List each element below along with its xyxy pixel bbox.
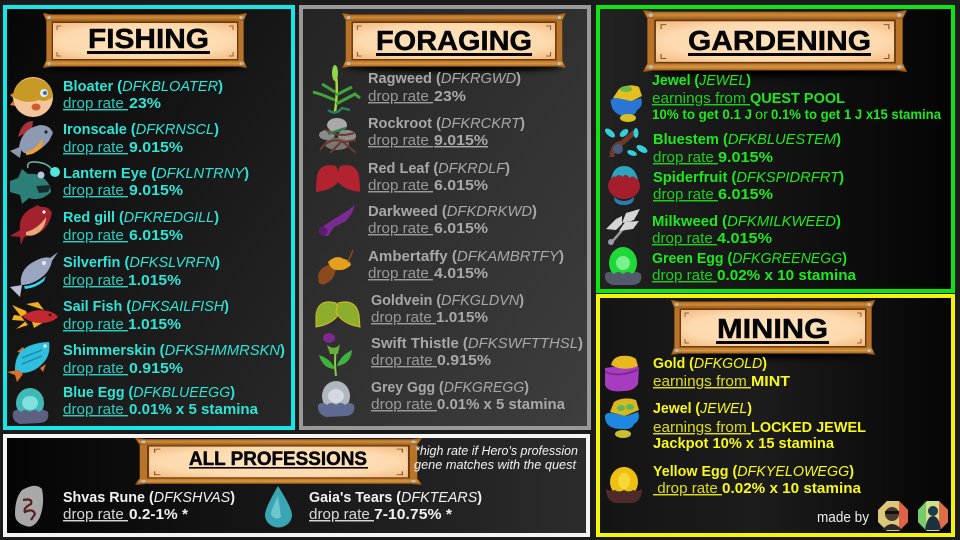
item: Swift Thistle: 0.915%: [437, 353, 491, 369]
item: Jewel (mining): [605, 398, 866, 452]
icon: shimmerskin: [7, 342, 49, 382]
item: Shvas Rune: Shvas Rune (DFKSHVAS): [63, 490, 235, 506]
item: Jewel: Jewel (JEWEL): [652, 73, 751, 89]
heading: mining: MINING: [717, 313, 828, 344]
icon: blue egg: [13, 388, 48, 424]
icon: ironscale: [10, 121, 53, 158]
item: Shimmerskin: [7, 342, 285, 382]
icon: jewel: [611, 85, 642, 122]
item: Red Leaf: [316, 161, 510, 194]
icon: swift thistle: [319, 333, 352, 376]
item: Blue Egg: drop rate: [63, 402, 128, 418]
icon: sail fish: [12, 302, 58, 329]
item: Bluestem: drop rate: [653, 150, 718, 166]
icon: red gill: [10, 205, 52, 245]
item: Gaia's Tears: [265, 486, 482, 527]
item: Shimmerskin: 0.915%: [129, 361, 183, 377]
icon: green egg: [605, 247, 641, 285]
item: Gaia's Tears: 7-10.75% *: [374, 507, 452, 523]
heading: all professions: ALL PROFESSIONS: [189, 449, 367, 470]
icon: grey egg: [318, 381, 354, 417]
item: Goldvein: drop rate: [371, 310, 436, 326]
item: Grey Egg: [318, 380, 566, 417]
icon: gaia's tear: [265, 486, 292, 527]
item: Ragweed: 23%: [434, 89, 466, 105]
item: Ambertaffy: 4.015%: [434, 266, 488, 282]
item: Ironscale: [10, 121, 219, 158]
heading: gardening: [643, 10, 907, 77]
item: Bluestem: Bluestem (DFKBLUESTEM): [653, 132, 841, 148]
item: Swift Thistle: [319, 333, 583, 376]
item: Lantern Eye: drop rate: [63, 183, 128, 199]
item: Grey Egg: drop rate: [371, 397, 437, 413]
item: Jewel: earnings from: [652, 91, 750, 107]
item: Red gill: Red gill (DFKREDGILL): [63, 210, 219, 226]
panel: mining: [598, 296, 953, 535]
item: Goldvein: [316, 293, 524, 327]
note: high rate footnote: [414, 444, 578, 472]
panel: fishing: [5, 7, 293, 428]
item: Green Egg: [605, 247, 857, 285]
note: high rate footnote: gene matches with the quest: [414, 458, 577, 472]
heading: gardening: GARDENING: [688, 25, 871, 56]
icon: avatar two: [918, 501, 948, 531]
item: Red gill: [10, 205, 219, 245]
item: Shvas Rune: 0.2-1% *: [129, 507, 188, 523]
item: Gaia's Tears: drop rate: [309, 507, 374, 523]
item: Green Egg: Green Egg (DFKGREENEGG): [652, 251, 847, 267]
item: Lantern Eye: [10, 162, 249, 204]
icon: milkweed: [606, 209, 640, 245]
item: Goldvein: Goldvein (DFKGLDVN): [371, 293, 524, 309]
item: Shimmerskin: drop rate: [63, 361, 128, 377]
item: Silverfin: drop rate: [63, 273, 128, 289]
item: Blue Egg: [13, 385, 259, 424]
item: Bloater: [10, 77, 223, 117]
item: Green Egg: drop rate: [652, 268, 717, 284]
item: Grey Egg: Grey Ggg (DFKGREGG): [371, 380, 529, 396]
item: Lantern Eye: Lantern Eye (DFKLNTRNY): [63, 166, 249, 182]
item: Jewel (mining): earnings from: [653, 420, 751, 436]
icon: red leaf: [316, 165, 360, 192]
item: Silverfin: 1.015%: [128, 273, 181, 289]
item: Rockroot: Rockroot (DFKRCKRT): [368, 116, 525, 132]
item: Ragweed: [313, 65, 521, 113]
item: Shvas Rune: [15, 486, 235, 527]
icon: bloater: [10, 77, 53, 117]
item: Bloater: Bloater (DFKBLOATER): [63, 79, 223, 95]
heading: foraging: FORAGING: [376, 25, 532, 56]
item: Shvas Rune: drop rate: [63, 507, 128, 523]
icon: avatar one: [878, 501, 908, 531]
item: Yellow Egg: drop rate: [653, 481, 722, 497]
item: Jewel: or: [755, 107, 769, 122]
icon: lantern eye: [10, 162, 60, 204]
item: Red Leaf: drop rate: [368, 178, 433, 194]
item: Rockroot: [319, 116, 525, 153]
item: Silverfin: Silverfin (DFKSLVRFN): [63, 255, 220, 271]
heading: all professions: [135, 438, 422, 485]
item: Swift Thistle: drop rate: [371, 353, 437, 369]
item: Milkweed: [606, 209, 841, 247]
credit: made by: [817, 501, 948, 531]
icon: bluestem: [603, 127, 649, 157]
item: Red gill: drop rate: [63, 228, 128, 244]
item: Lantern Eye: 9.015%: [129, 183, 183, 199]
item: Sail Fish: 1.015%: [128, 317, 181, 333]
item: Jewel (mining): Jewel (JEWEL): [653, 401, 752, 417]
item: Red gill: 6.015%: [129, 228, 183, 244]
item: Ragweed: drop rate: [368, 89, 433, 105]
item: Ironscale: drop rate: [63, 140, 128, 156]
item: Silverfin: [10, 252, 220, 297]
item: Spiderfruit: drop rate: [653, 187, 718, 203]
credit: made by: made by: [817, 510, 870, 526]
item: Yellow Egg: 0.02% x 10 stamina: [722, 481, 862, 497]
item: Ragweed: Ragweed (DFKRGWD): [368, 71, 521, 87]
item: Spiderfruit: [608, 166, 844, 205]
item: Milkweed: drop rate: [652, 231, 717, 247]
icon: gold: [605, 356, 639, 391]
item: Ironscale: 9.015%: [129, 140, 183, 156]
item: Jewel: 0.1% to get 1 J x15 stamina: [771, 107, 941, 122]
item: Blue Egg: 0.01% x 5 stamina: [129, 402, 259, 418]
item: Darkweed: Darkweed (DFKDRKWD): [368, 204, 537, 220]
item: Gold: [605, 356, 790, 391]
item: Spiderfruit: Spiderfruit (DFKSPIDRFRT): [653, 170, 844, 186]
item: Yellow Egg: Yellow Egg (DFKYELOWEGG): [653, 464, 854, 480]
item: Darkweed: drop rate: [368, 221, 433, 237]
item: Jewel: [611, 73, 941, 122]
item: Milkweed: Milkweed (DFKMILKWEED): [652, 214, 841, 230]
item: Gold: MINT: [751, 374, 790, 390]
item: Shimmerskin: Shimmerskin (DFKSHMMRSKN): [63, 343, 285, 359]
item: Red Leaf: Red Leaf (DFKRDLF): [368, 161, 510, 177]
item: Ambertaffy: [318, 249, 564, 284]
icon: yellow egg: [606, 467, 642, 503]
icon: ambertaffy: [318, 250, 353, 284]
item: Jewel: 10% to get 0.1 J: [652, 107, 752, 122]
item: Sail Fish: [12, 299, 229, 333]
item: Ironscale: Ironscale (DFKRNSCL): [63, 122, 219, 138]
item: Gold: Gold (DFKGOLD): [653, 356, 767, 372]
item: Spiderfruit: 6.015%: [718, 187, 773, 203]
item: Green Egg: 0.02% x 10 stamina: [717, 268, 857, 284]
item: Darkweed: 6.015%: [434, 221, 488, 237]
item: Sail Fish: Sail Fish (DFKSAILFISH): [63, 299, 229, 315]
item: Jewel (mining): LOCKED JEWEL: [751, 420, 866, 436]
item: Ambertaffy: drop rate: [368, 266, 433, 282]
heading: fishing: FISHING: [88, 23, 209, 54]
item: Milkweed: 4.015%: [717, 231, 772, 247]
item: Grey Egg: 0.01% x 5 stamina: [437, 397, 566, 413]
item: Rockroot: drop rate: [368, 133, 433, 149]
icon: spiderfruit: [608, 166, 640, 205]
item: Goldvein: 1.015%: [436, 310, 488, 326]
panel: gardening: [598, 7, 953, 291]
panel: all professions: [5, 436, 588, 535]
icon: shvas rune: [15, 486, 43, 527]
item: Gold: earnings from: [653, 374, 751, 390]
heading: foraging: [342, 13, 566, 72]
note: high rate footnote: *high rate if Hero's profession: [415, 444, 578, 458]
item: Ambertaffy: Ambertaffy (DFKAMBRTFY ): [368, 249, 564, 265]
icon: rockroot: [319, 118, 356, 153]
heading: fishing: [43, 13, 247, 72]
icon: jewel: [605, 398, 639, 438]
item: Bloater: 23%: [129, 96, 161, 112]
item: Bluestem: 9.015%: [718, 150, 773, 166]
item: Bluestem: [603, 127, 841, 166]
icon: darkweed: [318, 205, 355, 236]
item: Blue Egg: Blue Egg (DFKBLUEEGG): [63, 385, 235, 401]
heading: mining: [671, 300, 875, 359]
item: Bloater: drop rate: [63, 96, 128, 112]
item: Gaia's Tears: Gaia's Tears (DFKTEARS): [309, 490, 482, 506]
icon: ragweed: [313, 65, 360, 113]
item: Jewel (mining): Jackpot 10% x 15 stamina: [653, 436, 835, 452]
item: Yellow Egg: [606, 464, 862, 503]
item: Darkweed: [318, 204, 537, 237]
icon: silverfin: [10, 252, 58, 297]
panel: foraging: [301, 7, 589, 428]
item: Red Leaf: 6.015%: [434, 178, 488, 194]
item: Sail Fish: drop rate: [63, 317, 128, 333]
item: Rockroot: 9.015%: [434, 133, 488, 149]
item: Jewel: QUEST POOL: [750, 91, 845, 107]
item: Swift Thistle: Swift Thistle (DFKSWFTTHSL): [371, 336, 583, 352]
icon: goldvein: [316, 302, 360, 327]
